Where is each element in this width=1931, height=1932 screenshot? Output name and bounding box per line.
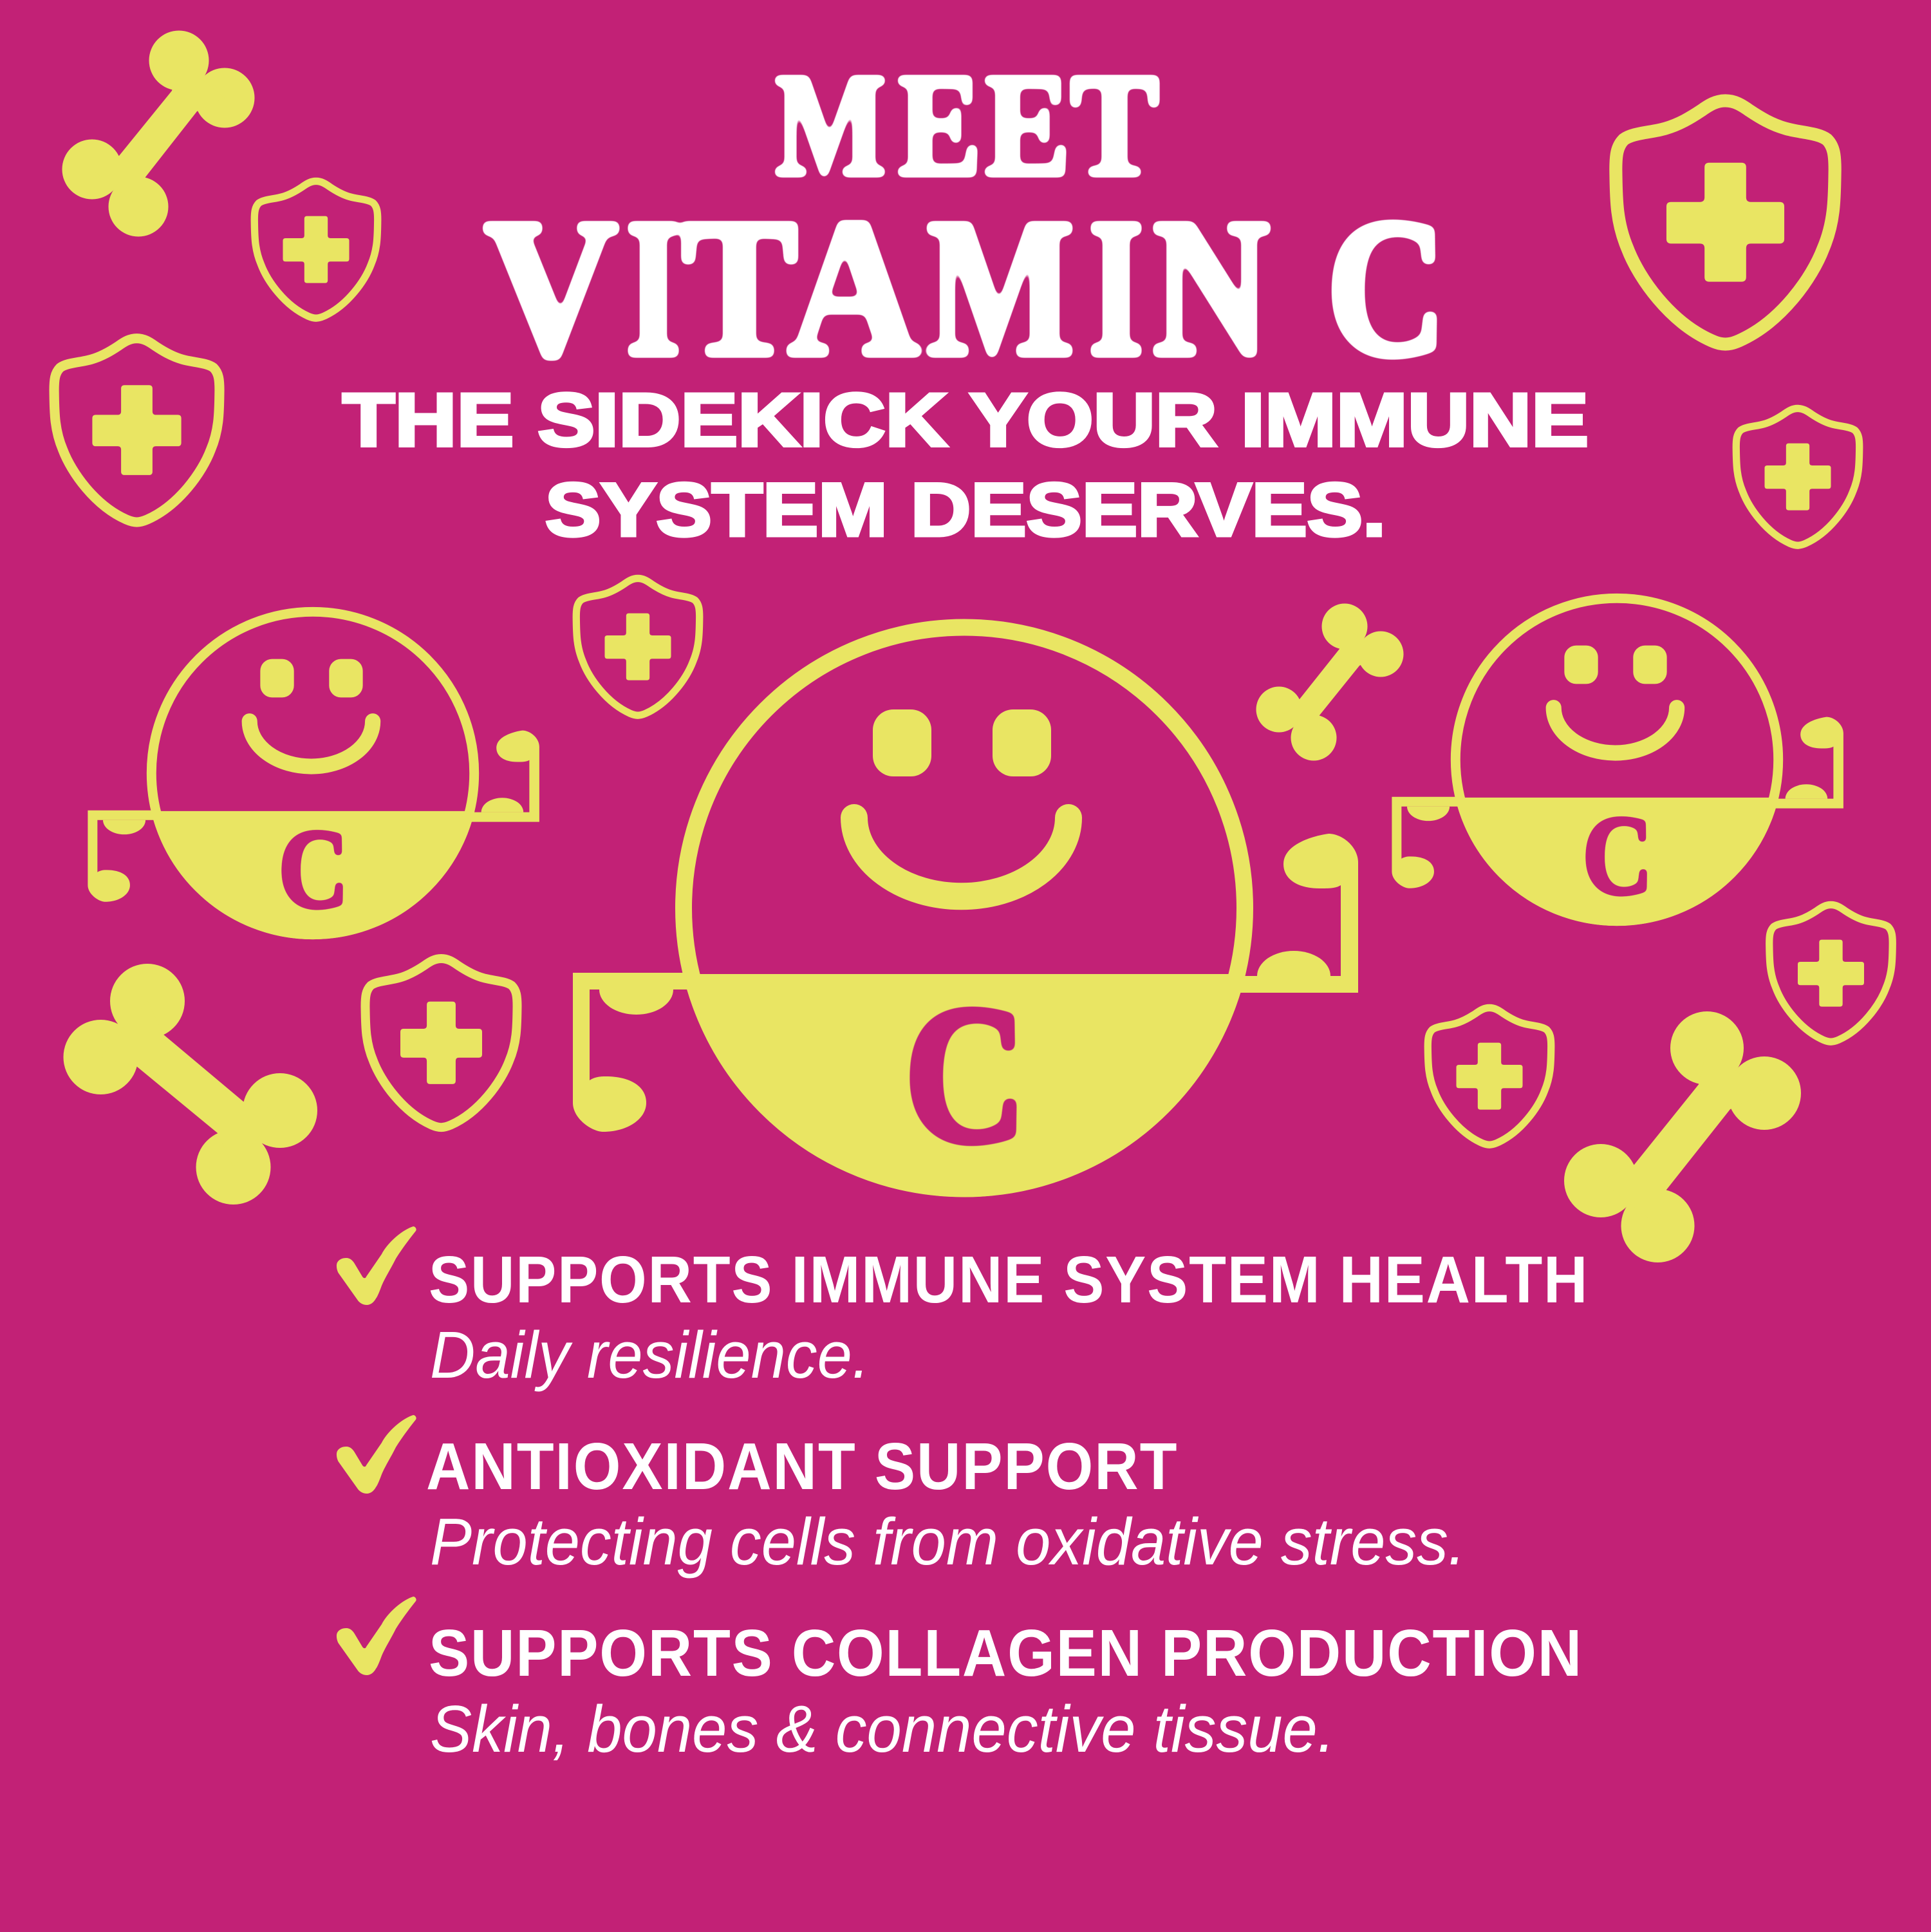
benefit: antioxidant support: Protecting cells from oxidative stress. [430,1505,1466,1579]
character: left flexing vitamin C smiley: C [279,807,349,932]
character: large flexing vitamin C smiley: C [904,965,1027,1184]
icon: bone lower left [63,964,317,1205]
benefit: immune system health: Daily resilience. [430,1318,870,1392]
character: large flexing vitamin C smiley [573,627,1358,1197]
benefit: antioxidant support [337,1415,1466,1579]
title line: MEET: E [898,43,982,207]
title line: VITAMIN C: N [1153,178,1270,397]
icon: check mark 3 [337,1597,416,1675]
title line: MEET: E [985,43,1070,207]
icon: shield lower far right [1769,905,1892,1042]
benefit: collagen production: Skin, bones & connective tissue. [430,1692,1335,1766]
icon: shield small top left [254,181,378,318]
title line: VITAMIN C: T [682,178,798,397]
character: left flexing vitamin C smiley [88,612,539,939]
icon: check mark 1 [337,1226,416,1305]
title line: MEET: M [775,43,886,207]
title line: VITAMIN C: M [927,178,1074,397]
icon: shield left [54,339,219,522]
icon: shield above centre character [576,578,700,715]
subheading: THE SIDEKICK YOUR IMMUNE [342,377,1589,462]
title line: VITAMIN C: V [484,178,618,397]
title line: VITAMIN C: C [1327,178,1446,397]
icon: shield lower left [365,959,518,1127]
character: right flexing vitamin C smiley: C [1583,793,1653,919]
title line: MEET [775,43,1160,207]
benefit: collagen production: SUPPORTS COLLAGEN PRODUCTION [429,1615,1581,1690]
benefit: immune system health [337,1226,1587,1392]
icon: check mark 2 [337,1415,416,1494]
benefit: collagen production [337,1597,1581,1766]
icon: bone top left [62,31,255,237]
title line: MEET: T [1070,43,1159,207]
character: right flexing vitamin C smiley [1392,598,1843,926]
benefit: antioxidant support: ANTIOXIDANT SUPPORT [426,1429,1177,1503]
subheading [342,377,1589,552]
icon: shield lower centre right [1428,1008,1551,1145]
icon: shield small right [1736,408,1860,545]
benefit: immune system health: SUPPORTS IMMUNE SYSTEM HEALTH [429,1242,1587,1317]
subheading: SYSTEM DESERVES. [545,467,1386,552]
icon: bone centre right [1256,604,1403,761]
title line: VITAMIN C: A [788,178,919,397]
icon: shield large top right [1616,100,1835,344]
title line: VITAMIN C: I [1088,178,1144,397]
title line: VITAMIN C: I [626,178,681,397]
title line: VITAMIN C [483,178,1446,397]
icon: bone lower right [1564,1011,1801,1262]
